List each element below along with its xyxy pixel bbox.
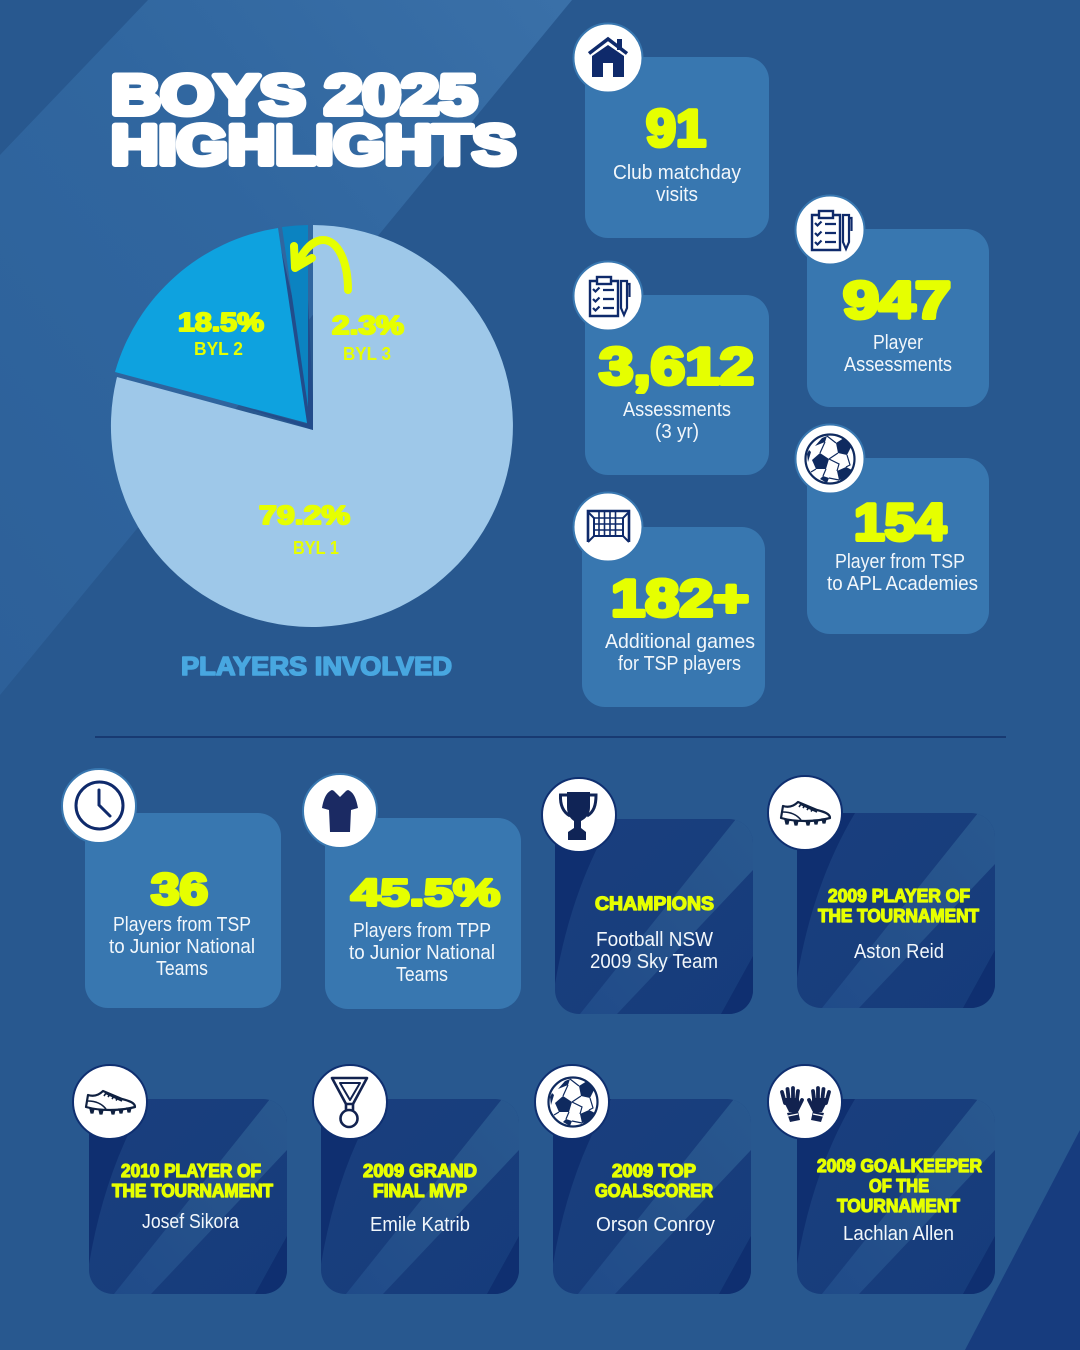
award title: 2009 GOALKEEPER [817,1156,982,1176]
award detail: Josef Sikora [142,1211,240,1233]
stat label: to APL Academies [827,573,978,595]
stat label: Player from TSP [835,551,965,573]
panel: 2010 player of the tournament [73,1065,287,1294]
stat label [349,920,495,986]
award detail: 2009 Sky Team [590,951,718,973]
panel: 2009 player of the tournament [768,776,995,1008]
title: BOYS 2025 [111,63,477,126]
stat number: 45.5% [351,872,500,914]
panel: junior national players [62,769,281,1008]
award title: 2009 PLAYER OF [828,886,970,906]
pie label 2.3%: BYL 3 [343,343,391,364]
stat label: Club matchday [613,162,741,184]
award title: 2009 TOP [612,1161,696,1181]
stat label: Players from TPP [353,920,491,942]
award detail: Lachlan Allen [843,1223,954,1245]
panel: TPP to junior national [303,774,521,1009]
pie label 18.5% [178,307,264,359]
panel: assessments 3 yr [574,262,769,475]
icon: football boot [768,776,842,850]
stat label [844,332,952,376]
award title: TOURNAMENT [837,1196,960,1216]
award title: FINAL MVP [373,1181,467,1201]
stat number: 3,612 [599,338,754,396]
panel: top goalscorer [535,1065,751,1294]
award title [818,886,979,926]
panel: club matchday visits [574,24,769,238]
title [111,63,516,176]
panel: champions [542,778,753,1014]
award title: 2009 GRAND [363,1161,477,1181]
pie label 2.3%: 2.3% [332,310,404,340]
award title [363,1161,477,1201]
stat number: 36 [151,865,208,914]
award detail: Aston Reid [854,941,944,963]
icon: goalkeeper gloves [768,1065,842,1139]
title: HIGHLIGHTS [111,113,516,176]
stat label: Teams [156,958,208,980]
award title: 2010 PLAYER OF [121,1161,261,1181]
award title [817,1156,982,1216]
stat label: visits [656,184,698,206]
stat label: Assessments [844,354,952,376]
icon: trophy [542,778,616,852]
pie label 2.3% [332,310,404,364]
stat number: 91 [646,100,706,158]
panel: TSP to APL academies [796,424,989,634]
icon: soccer ball [535,1065,609,1139]
icon: clipboard [574,262,642,330]
background corner bottom right [965,1130,1080,1350]
stat label: to Junior National [109,936,255,958]
stat label: (3 yr) [655,421,699,443]
stat label: for TSP players [618,653,741,675]
stat number: 947 [843,272,951,330]
pie label 79.2% [259,500,350,558]
stat number: 154 [854,494,946,552]
panel: grand final MVP [313,1065,519,1294]
icon: soccer ball [796,424,864,494]
award title: GOALSCORER [595,1181,713,1201]
pie label 79.2%: 79.2% [259,500,350,530]
pie label 79.2%: BYL 1 [293,537,339,558]
award detail: Orson Conroy [596,1214,715,1236]
icon: goal [574,492,642,562]
stat label: Assessments [623,399,731,421]
stat label [605,631,755,675]
panel: additional games [574,492,765,707]
icon: house [574,24,642,92]
stat label: Player [873,332,923,354]
icon: clock [62,769,136,843]
award title: THE TOURNAMENT [112,1181,273,1201]
stat label [109,914,255,980]
chart caption: PLAYERS INVOLVED [181,651,452,681]
panel: player assessments [796,196,989,407]
award title [112,1161,273,1201]
stat label: Teams [396,964,448,986]
award detail: Football NSW [596,929,713,951]
award title [595,1161,713,1201]
icon: football boot [73,1065,147,1139]
stat number: 182+ [611,570,749,628]
stat label: Additional games [605,631,755,653]
stat label [613,162,741,206]
panel: goalkeeper of the tournament [768,1065,995,1294]
stat label [623,399,731,443]
award title: THE TOURNAMENT [818,906,979,926]
award title: OF THE [869,1176,929,1196]
stat label [827,551,978,595]
pie chart: players involved [111,225,513,627]
background diagonal band [0,0,572,695]
icon: clipboard [796,196,864,264]
award title: CHAMPIONS [595,894,714,915]
award detail: Emile Katrib [370,1214,470,1236]
stat label: Players from TSP [113,914,251,936]
divider [95,736,1006,738]
stat label: to Junior National [349,942,495,964]
icon: medal [313,1065,387,1139]
pie label 18.5%: BYL 2 [194,338,243,359]
arrow [294,240,348,290]
pie label 18.5%: 18.5% [178,307,264,337]
award detail [590,929,718,973]
icon: jersey [303,774,377,848]
